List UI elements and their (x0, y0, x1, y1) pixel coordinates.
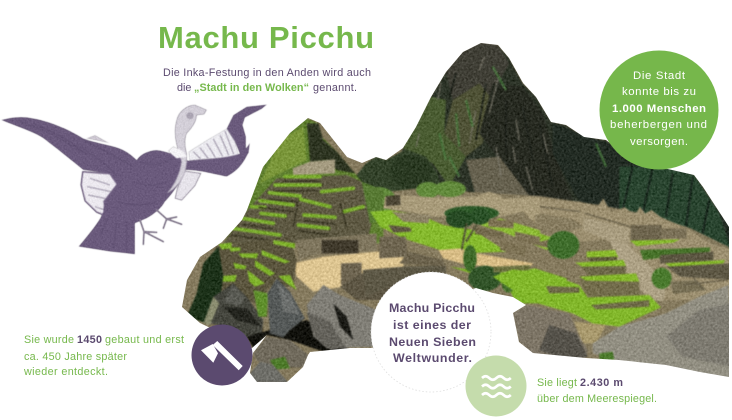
callout circle: Neue Sieben Weltwunder: Machu Picchu (389, 301, 475, 315)
title: Machu Picchu (158, 20, 374, 55)
condor collar (168, 146, 187, 158)
left plaza, sand and ruins (187, 233, 403, 383)
callout circle: Neue Sieben Weltwunder: Neuen Sieben (389, 335, 476, 349)
intro text: genannt. (313, 82, 357, 94)
callout circle: 1.000 Menschen (600, 50, 718, 170)
green between rocks (253, 290, 268, 317)
foreground hills (356, 150, 439, 192)
intro text: die (177, 82, 191, 94)
text: built in 1450: 1450 (77, 334, 102, 346)
Huayna Picchu mountain (356, 43, 729, 250)
callout circle: Neue Sieben Weltwunder (371, 272, 491, 392)
condor feather stripes (87, 131, 234, 210)
green terraces lower left (215, 237, 297, 303)
left terraced hill (223, 118, 383, 243)
ruin wall behind center circle (362, 265, 446, 279)
photo: Machu Picchu ruins and mountains (180, 40, 732, 385)
condor hanging feathers (175, 171, 201, 200)
left rock (203, 283, 263, 338)
condor right white feathers (188, 128, 239, 161)
text: built in 1450: gebaut und erst (105, 334, 184, 346)
ruins ground base (377, 188, 729, 298)
right terraces and buildings (540, 198, 732, 301)
text: built in 1450: Sie wurde (24, 334, 74, 346)
condor plumage lines (20, 122, 173, 252)
condor legs (140, 210, 182, 244)
photo backing (180, 40, 732, 385)
bushes behind ruins (376, 180, 467, 211)
lower rock (250, 362, 288, 383)
illustration: condor (1, 104, 267, 254)
callout circle: Neue Sieben Weltwunder: Weltwunder. (393, 351, 472, 365)
text: altitude: über dem Meerespiegel. (537, 393, 657, 405)
callout circle: 1.000 Menschen: versorgen. (630, 136, 688, 148)
big right rock (593, 285, 731, 380)
right rock (307, 285, 377, 349)
foreground rocks and lawn (363, 237, 731, 380)
middle rock (267, 278, 305, 337)
icon: water waves (466, 356, 526, 416)
intro text (163, 67, 371, 94)
text: built in 1450: wieder entdeckt. (23, 366, 108, 378)
callout circle: 1.000 Menschen: Die Stadt (633, 70, 686, 82)
intro text: „Stadt in den Wolken“ (194, 82, 309, 94)
condor eye (186, 112, 194, 119)
callout circle: 1.000 Menschen: beherbergen und (610, 119, 707, 131)
callout circle: 1.000 Menschen: 1.000 Menschen (612, 103, 706, 115)
condor back feather (86, 135, 110, 143)
callout circle: Neue Sieben Weltwunder: ist eines der (393, 318, 471, 332)
condor left white feathers (81, 172, 117, 217)
shrubs near the front (468, 266, 502, 291)
condor neck and head (168, 105, 207, 193)
tree (444, 206, 499, 272)
text: built in 1450 (23, 334, 184, 378)
central lawns and ruins (370, 192, 567, 303)
dark gap between rocks (247, 320, 350, 352)
text: altitude: 2.430 m (580, 377, 623, 389)
callout circle: 1.000 Menschen: konnte bis zu (622, 86, 696, 98)
condor body and wings (1, 117, 249, 254)
text: altitude: Sie liegt (537, 377, 577, 389)
front left rock (534, 321, 584, 344)
text: built in 1450: ca. 450 Jahre später (24, 351, 127, 363)
boulder (253, 337, 308, 367)
dark forest edge (187, 247, 223, 323)
condor right wing tip (227, 104, 267, 154)
intro text: Die Inka-Festung in den Anden wird auch (163, 67, 371, 79)
text: altitude (537, 377, 657, 405)
icon: axe (192, 324, 252, 386)
